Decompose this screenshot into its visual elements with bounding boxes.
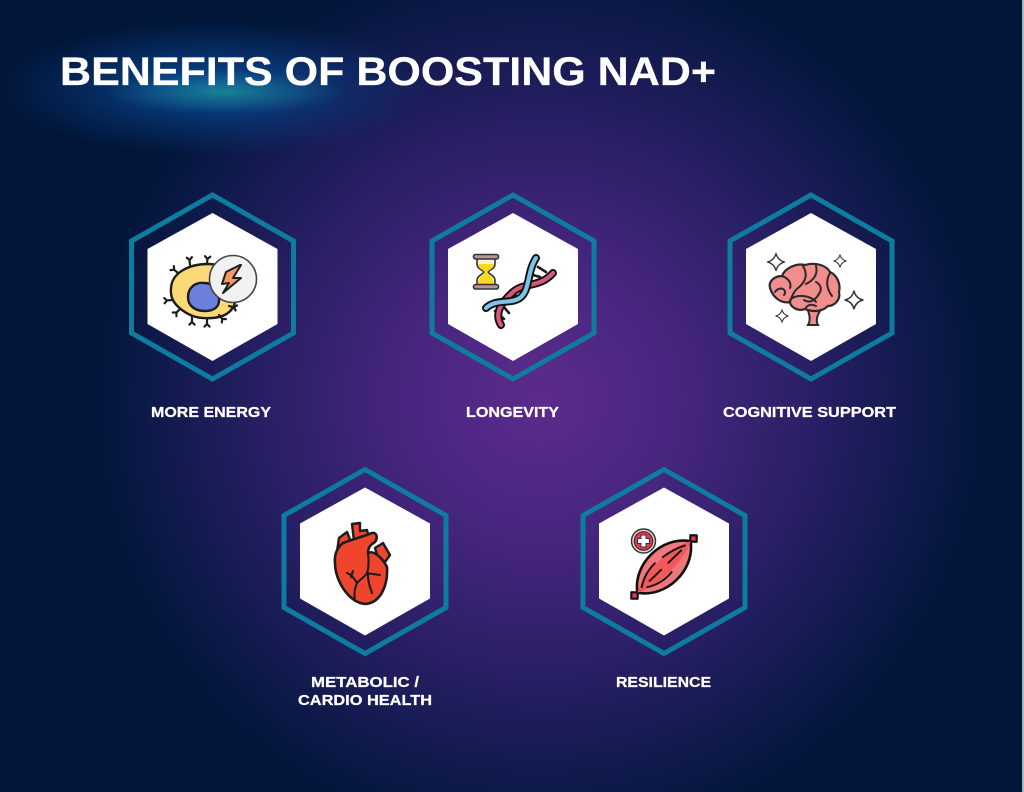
label: metabolic / cardio health: METABOLIC /	[311, 675, 419, 691]
icon: muscle	[619, 522, 709, 612]
title: BENEFITS OF BOOSTING NAD+	[60, 50, 716, 94]
hexagon frame: cognitive support	[730, 195, 892, 379]
panel: longevity	[432, 195, 594, 421]
panel: cognitive support	[723, 195, 896, 421]
panel: more energy	[132, 195, 294, 421]
icon: anatomical heart	[335, 523, 390, 604]
hexagon frame: longevity	[432, 195, 594, 379]
label: longevity: LONGEVITY	[466, 405, 559, 421]
icon: cell with energy bolt	[164, 256, 256, 327]
panel: resilience	[583, 470, 745, 691]
label: cognitive support: COGNITIVE SUPPORT	[723, 405, 896, 421]
panel: metabolic / cardio health	[284, 470, 446, 709]
hexagon frame: more energy	[132, 195, 294, 379]
label: more energy: MORE ENERGY	[151, 405, 271, 421]
icon: health plus badge	[632, 529, 656, 553]
label: resilience: RESILIENCE	[616, 675, 711, 691]
label: metabolic / cardio health	[298, 675, 432, 709]
icon: brain with sparkles	[768, 254, 863, 325]
label: metabolic / cardio health: CARDIO HEALTH	[298, 693, 432, 709]
icon: DNA helix	[486, 258, 553, 325]
hexagon frame: metabolic / cardio health	[284, 470, 446, 654]
icon: hourglass	[474, 254, 498, 289]
hexagon frame: resilience	[583, 470, 745, 654]
